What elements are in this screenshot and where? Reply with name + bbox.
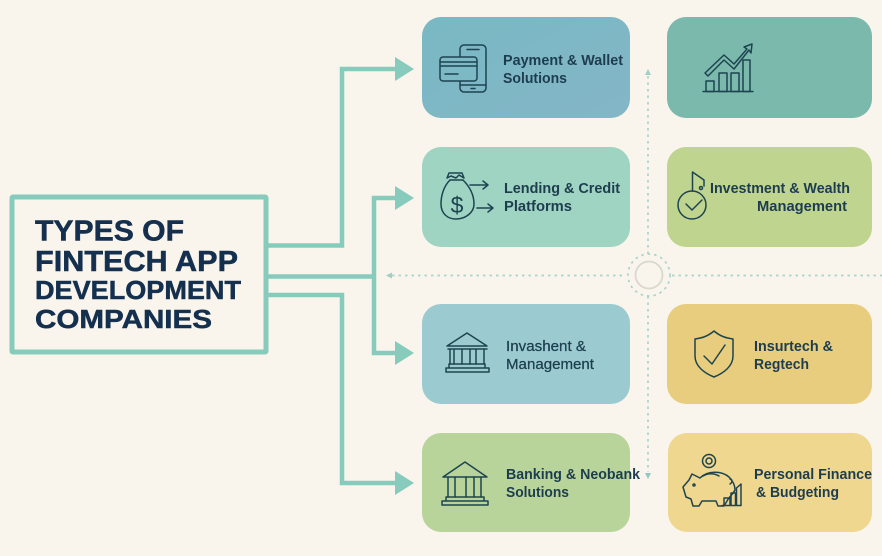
label: Personal Finance xyxy=(754,467,872,483)
panel: growth chart xyxy=(667,17,872,118)
label: Platforms xyxy=(504,199,572,215)
panel: insurtech and regtech xyxy=(667,304,872,404)
label: Solutions xyxy=(506,485,569,501)
label: Payment & Wallet xyxy=(503,53,623,69)
icon: phone and card xyxy=(440,45,486,92)
label: Lending & Credit xyxy=(504,181,620,197)
icon: bank xyxy=(442,462,488,505)
title: DEVELOPMENT xyxy=(35,275,241,305)
label: Management xyxy=(757,199,847,215)
label: Banking & Neobank xyxy=(506,467,641,483)
panel: banking and neobank xyxy=(422,433,641,532)
label: Solutions xyxy=(503,71,567,87)
label: & Budgeting xyxy=(756,485,839,501)
icon: bank xyxy=(446,333,489,372)
icon: note and check circle xyxy=(678,172,706,219)
label: Regtech xyxy=(754,357,809,373)
title box xyxy=(12,197,266,352)
panel: investment and wealth xyxy=(667,147,872,247)
panel: lending and credit xyxy=(422,147,630,247)
icon glyph: dollar: $ xyxy=(451,192,464,218)
title: COMPANIES xyxy=(35,304,212,334)
panel: personal finance xyxy=(668,433,872,532)
icon: shield with check xyxy=(695,331,733,377)
label: Investment & Wealth xyxy=(710,181,850,197)
connector lines from title box to cards xyxy=(268,57,414,495)
icon: money bag with arrows xyxy=(441,173,493,219)
title: TYPES OF xyxy=(35,216,184,248)
label: Insurtech & xyxy=(754,339,834,355)
label: Invashent & xyxy=(506,339,586,355)
label: Management xyxy=(506,357,594,373)
icon: bar chart with arrow xyxy=(703,44,753,92)
dotted hub and axes xyxy=(386,69,882,479)
panel: investment and management xyxy=(422,304,630,404)
icon: piggy bank with coin and bars xyxy=(683,454,741,506)
panel: payment and wallet xyxy=(422,17,630,118)
title: FINTECH APP xyxy=(35,246,238,278)
